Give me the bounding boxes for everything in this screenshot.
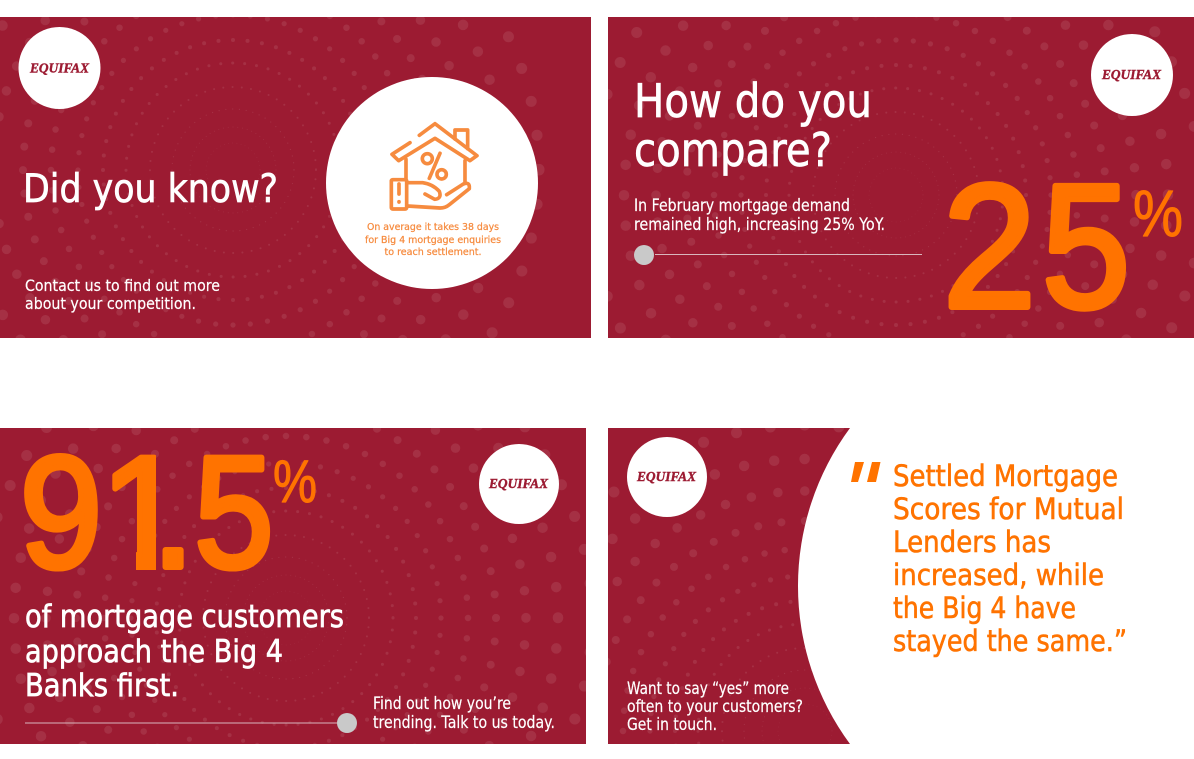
heading: how do you compare: compare? bbox=[634, 123, 832, 177]
icon: Equifax logo badge bbox=[479, 444, 559, 524]
text block: get in touch: Want to say “yes” more bbox=[627, 679, 789, 698]
big number: 91.5 percent: % bbox=[273, 448, 317, 515]
heading: did you know: Did you know? bbox=[23, 167, 278, 212]
big number: 91.5 percent: 9 bbox=[20, 423, 102, 601]
text block: mortgage customers: of mortgage customers bbox=[25, 599, 344, 635]
text block: contact us: Contact us to find out more bbox=[25, 276, 220, 295]
slider bbox=[634, 245, 922, 265]
text block: find out: Find out how you’re bbox=[373, 694, 511, 713]
big number: 25 percent: % bbox=[1133, 176, 1183, 250]
icon: Equifax logo badge: EQUIFAX bbox=[1101, 67, 1162, 82]
icon: Equifax logo badge bbox=[1091, 34, 1173, 116]
icon: Equifax logo badge bbox=[627, 437, 707, 517]
slider bbox=[25, 713, 357, 733]
big number: 91.5 percent: 5 bbox=[194, 423, 273, 601]
callout: settlement statistic circle bbox=[326, 77, 538, 289]
panel: quote bbox=[608, 428, 1127, 744]
icon: Equifax logo badge: EQUIFAX bbox=[488, 476, 549, 491]
text block: get in touch: often to your customers? bbox=[627, 697, 803, 716]
quote text: the Big 4 have bbox=[893, 591, 1076, 625]
panel: did you know bbox=[0, 17, 591, 338]
quote text: increased, while bbox=[893, 558, 1104, 592]
text block: mortgage customers: Banks first. bbox=[25, 668, 179, 704]
text block: get in touch: Get in touch. bbox=[627, 715, 717, 734]
big number: 91.5 percent: . bbox=[151, 423, 195, 601]
quote text: stayed the same.” bbox=[893, 624, 1127, 658]
text block: find out: trending. Talk to us today. bbox=[373, 713, 555, 732]
big number: 25 percent bbox=[943, 149, 1183, 345]
text block: contact us: about your competition. bbox=[25, 294, 196, 313]
quote text: Settled Mortgage bbox=[893, 459, 1118, 493]
icon: Equifax logo badge: EQUIFAX bbox=[29, 60, 90, 76]
big number: 91.5 percent: 1 bbox=[100, 423, 188, 601]
text block: settlement statistic: to reach settlement. bbox=[384, 247, 482, 258]
icon: Equifax logo badge: EQUIFAX bbox=[636, 469, 697, 484]
big number: 91.5 percent bbox=[24, 453, 316, 572]
panel: how do you compare bbox=[608, 17, 1194, 345]
text block: February demand: remained high, increasing 25% YoY. bbox=[634, 215, 885, 234]
heading: how do you compare: How do you bbox=[634, 74, 872, 128]
text block: February demand: In February mortgage demand bbox=[634, 196, 850, 215]
text block: mortgage customers: approach the Big 4 bbox=[25, 634, 283, 670]
text block: settlement statistic: On average it takes 38 days bbox=[367, 222, 499, 233]
big number: 25 percent: 5 bbox=[1042, 149, 1130, 345]
quote text: Lenders has bbox=[893, 525, 1051, 559]
icon: Equifax logo badge bbox=[18, 27, 100, 109]
icon: house with percent in hand bbox=[391, 124, 477, 209]
big number: 25 percent: 2 bbox=[943, 149, 1036, 345]
quote text: Scores for Mutual bbox=[893, 492, 1124, 526]
panel: 91.5 percent bbox=[0, 423, 586, 744]
text block: settlement statistic: for Big 4 mortgage enquiries bbox=[365, 235, 501, 246]
icon: quotation mark bbox=[851, 462, 880, 482]
